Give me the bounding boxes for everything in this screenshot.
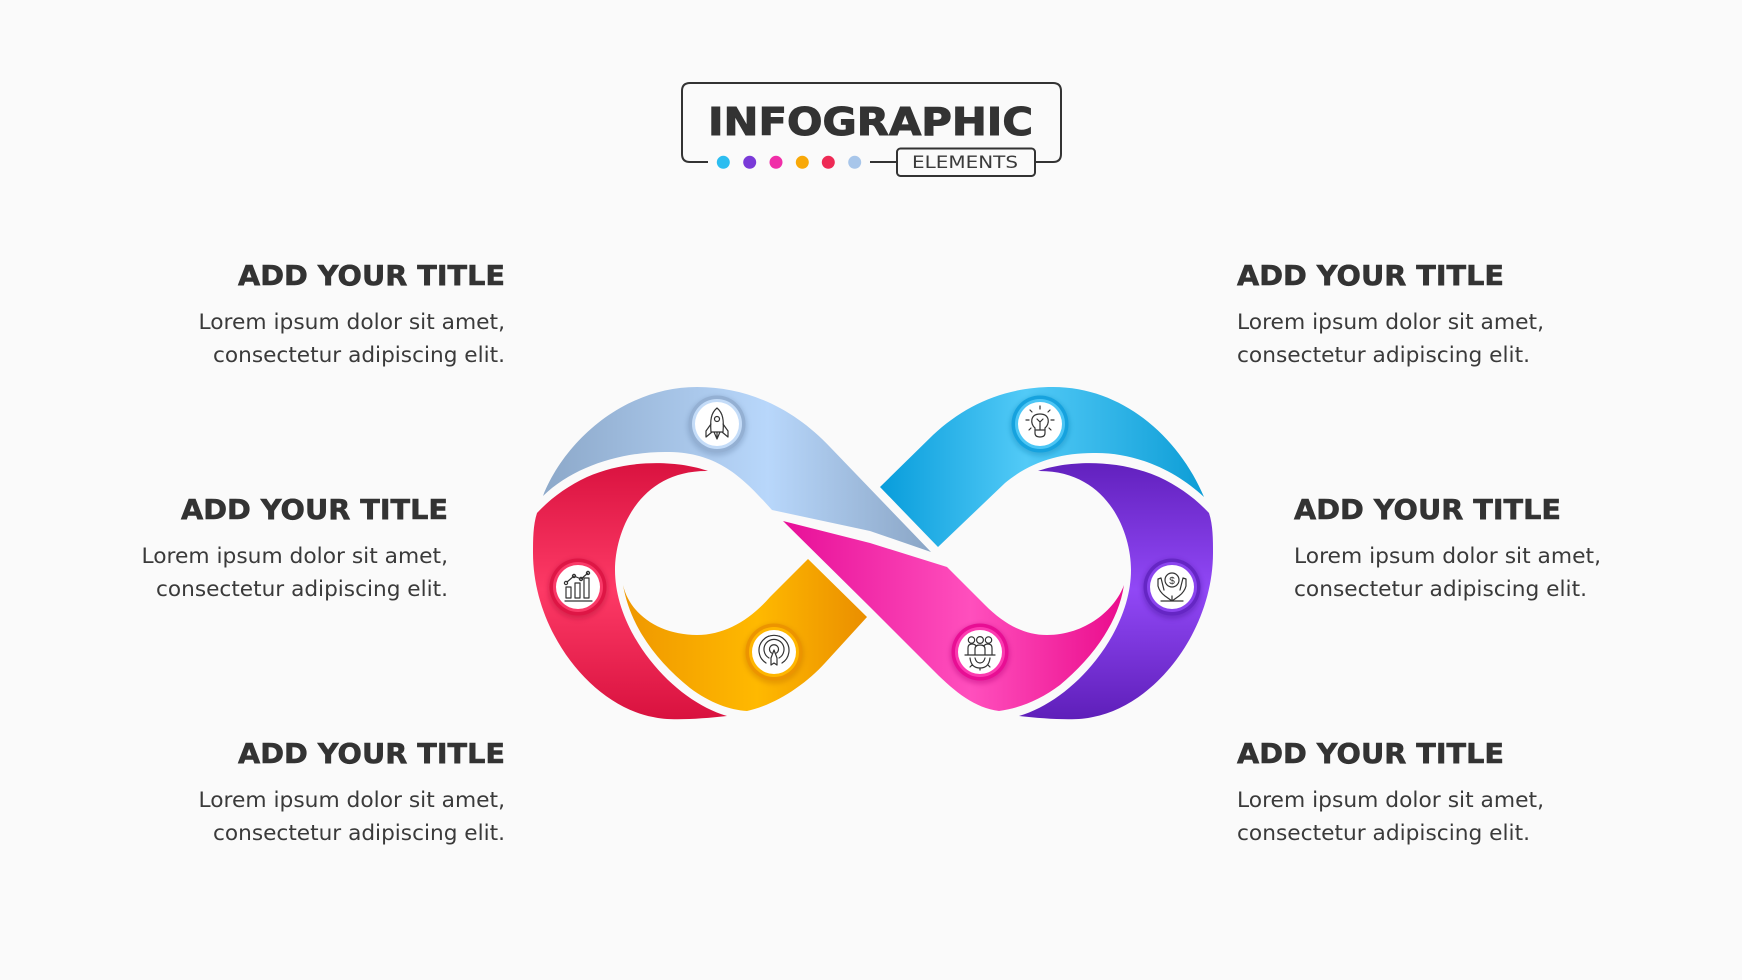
text block: top left: ADD YOUR TITLE	[238, 260, 505, 292]
text block: top left: Lorem ipsum dolor sit amet,	[198, 310, 505, 335]
header badge	[682, 83, 1061, 176]
text block: top right: Lorem ipsum dolor sit amet,	[1237, 310, 1544, 335]
text block: bottom right: Lorem ipsum dolor sit amet,	[1237, 788, 1544, 813]
text block: middle right: ADD YOUR TITLE	[1294, 494, 1561, 526]
segment: purple	[1019, 463, 1213, 719]
text block: top right	[1237, 260, 1544, 368]
text block: bottom right: consectetur adipiscing elit.	[1237, 821, 1530, 846]
icon: rocket	[687, 396, 747, 456]
header frame	[682, 83, 1061, 162]
subheading pill: elements	[897, 148, 1035, 176]
segment: amber	[623, 559, 867, 711]
segment: red	[533, 463, 727, 719]
text block: middle right: consectetur adipiscing elit.	[1294, 577, 1587, 602]
segment: pink	[783, 521, 1124, 711]
text block: top left: consectetur adipiscing elit.	[213, 343, 505, 368]
text block: middle right: Lorem ipsum dolor sit amet,	[1294, 544, 1601, 569]
segment: cyan	[880, 387, 1204, 547]
text block: middle left	[142, 494, 448, 602]
icon: team with gear	[950, 624, 1010, 684]
segment: light blue	[543, 387, 931, 552]
text block: bottom right	[1237, 738, 1544, 846]
text block: top right: ADD YOUR TITLE	[1237, 260, 1504, 292]
text block: bottom left: Lorem ipsum dolor sit amet,	[198, 788, 505, 813]
text block: bottom left: ADD YOUR TITLE	[238, 738, 505, 770]
heading: infographic: INFOGRAPHIC	[708, 100, 1033, 144]
icon: light bulb	[1010, 396, 1070, 456]
icon: hands with coin: $	[1169, 576, 1175, 587]
text block: middle right	[1294, 494, 1601, 602]
text block: middle left: ADD YOUR TITLE	[181, 494, 448, 526]
text block: bottom left: consectetur adipiscing elit.	[213, 821, 505, 846]
text block: bottom left	[198, 738, 505, 846]
text block: top left	[198, 260, 505, 368]
text block: top right: consectetur adipiscing elit.	[1237, 343, 1530, 368]
colour dots	[717, 156, 861, 169]
icon: chart	[548, 558, 608, 619]
text block: middle left: Lorem ipsum dolor sit amet,	[142, 544, 448, 569]
icon: target signal	[744, 624, 804, 684]
text block: middle left: consectetur adipiscing elit.	[156, 577, 448, 602]
icon: hands with coin	[1142, 558, 1202, 619]
infinity diagram	[533, 387, 1213, 719]
text block: bottom right: ADD YOUR TITLE	[1237, 738, 1504, 770]
subheading pill: elements: ELEMENTS	[912, 153, 1018, 172]
